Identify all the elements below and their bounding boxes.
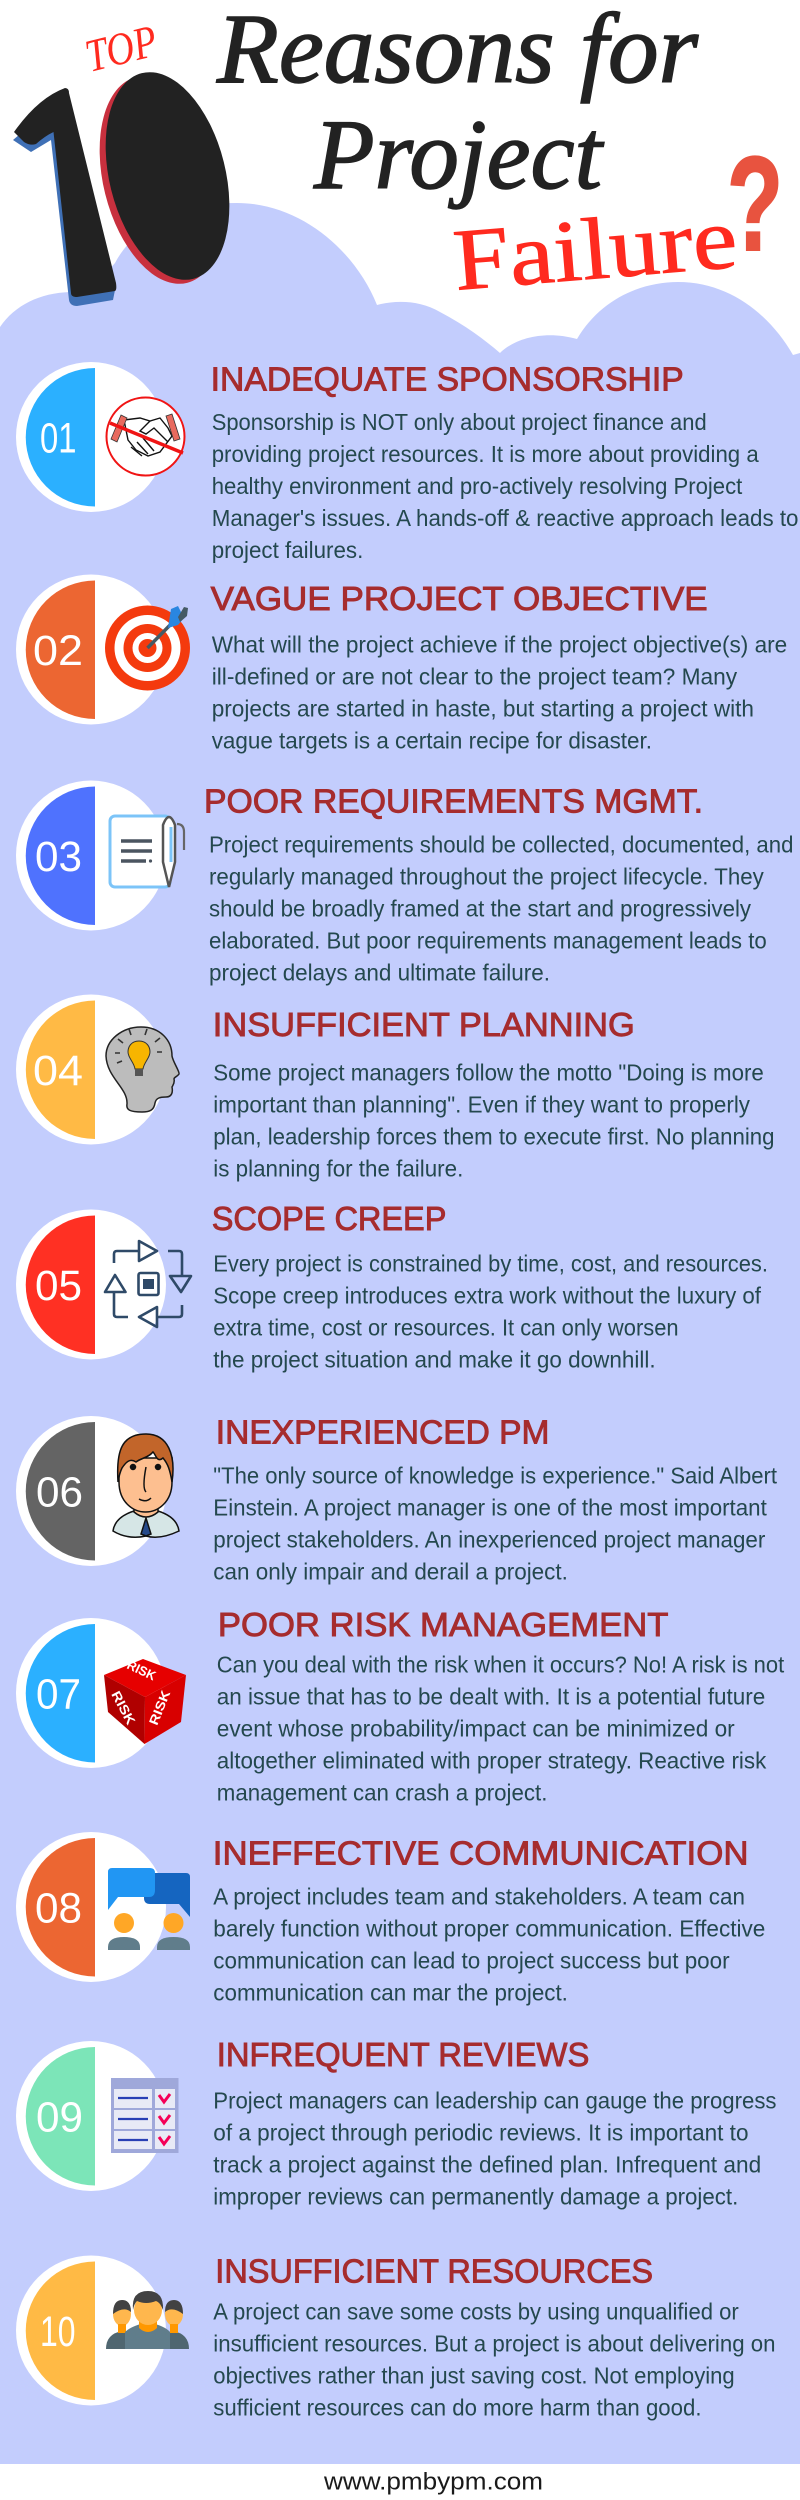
heading: VAGUE PROJECT OBJECTIVE	[211, 580, 708, 617]
body text: Einstein. A project manager is one of the most important	[213, 1494, 767, 1520]
body text	[209, 831, 793, 985]
body text: Every project is constrained by time, cost, and resources.	[213, 1251, 768, 1277]
body text: management can crash a project.	[217, 1779, 547, 1805]
number badge 09: 09	[36, 2094, 83, 2142]
heading: INFREQUENT REVIEWS	[217, 2036, 589, 2073]
body text	[212, 631, 787, 753]
panel: 05 scope creep	[16, 1200, 768, 1373]
number badge 04	[16, 994, 166, 1144]
body text	[213, 2298, 776, 2420]
body text: communication can mar the project.	[213, 1979, 568, 2005]
body text: vague targets is a certain recipe for disaster.	[212, 727, 652, 753]
body text: of a project through periodic reviews. It is important to	[213, 2119, 749, 2145]
body text: track a project against the defined plan. Infrequent and	[213, 2151, 761, 2177]
body text: event whose probability/impact can be minimized or	[217, 1715, 735, 1741]
body text: altogether eliminated with proper strategy. Reactive risk	[217, 1747, 767, 1773]
body text: plan, leadership forces them to execute first. No planning	[213, 1124, 775, 1150]
icon: checklist	[111, 2078, 178, 2153]
body text: sufficient resources can do more harm than good.	[213, 2394, 702, 2420]
number badge 01	[16, 362, 166, 512]
icon: risk die	[104, 1657, 186, 1744]
body text: extra time, cost or resources. It can only worsen	[213, 1315, 679, 1341]
number badge 09	[16, 2041, 166, 2191]
body text: healthy environment and pro-actively resolving Project	[212, 473, 743, 499]
heading: INSUFFICIENT RESOURCES	[215, 2252, 653, 2289]
body text: objectives rather than just saving cost. Not employing	[213, 2362, 735, 2388]
heading line: Failure: Failure	[450, 190, 741, 310]
icon: project manager	[113, 1434, 179, 1537]
panel: 09 infrequent reviews	[16, 2036, 776, 2209]
number badge 03: 03	[35, 833, 82, 881]
body text: Scope creep introduces extra work without the luxury of	[213, 1283, 762, 1309]
number badge 08	[16, 1832, 166, 1982]
body text: an issue that has to be dealt with. It is a potential future	[217, 1683, 765, 1709]
number badge 07: 07	[36, 1670, 81, 1718]
heading: INSUFFICIENT PLANNING	[213, 1006, 635, 1043]
number badge 03	[16, 780, 166, 930]
panel: 02 vague project objective	[16, 574, 787, 753]
body text: A project can save some costs by using unqualified or	[213, 2298, 739, 2324]
body text: is planning for the failure.	[213, 1156, 463, 1182]
icon: team of people	[106, 2291, 189, 2349]
number badge 07	[16, 1618, 166, 1768]
heading: SCOPE CREEP	[212, 1200, 446, 1237]
body text: project delays and ultimate failure.	[209, 959, 550, 985]
heading: POOR REQUIREMENTS MGMT.	[204, 782, 703, 819]
body text: barely function without proper communication. Effective	[213, 1915, 765, 1941]
number badge 08: 08	[35, 1884, 82, 1932]
body text: ill-defined or are not clear to the project team? Many	[212, 663, 738, 689]
heading: INADEQUATE SPONSORSHIP	[211, 361, 684, 398]
body text: regularly managed throughout the project lifecycle. They	[209, 863, 764, 889]
body text: important than planning". Even if they want to properly	[213, 1092, 750, 1118]
body text: Sponsorship is NOT only about project finance and	[212, 409, 707, 435]
body text: Project requirements should be collected, documented, and	[209, 831, 793, 857]
body text	[213, 2087, 777, 2209]
icon: cycle arrows	[105, 1241, 191, 1327]
icon: risk die: RISK	[146, 1687, 174, 1727]
panel: 01 inadequate sponsorship	[16, 361, 798, 563]
icon: notepad and pen	[110, 816, 184, 887]
title	[13, 0, 783, 310]
heading: INEXPERIENCED PM	[216, 1413, 550, 1450]
body text: Project managers can leadership can gauge the progress	[213, 2087, 777, 2113]
body text: should be broadly framed at the start and progressively	[209, 895, 751, 921]
body text: communication can lead to project success but poor	[213, 1947, 730, 1973]
panel: 03 poor requirements mgmt	[16, 780, 793, 985]
body text	[212, 409, 798, 563]
heading: POOR RISK MANAGEMENT	[218, 1606, 668, 1643]
body text: project failures.	[212, 537, 363, 563]
footer website: www.pmbypm.com	[323, 2468, 543, 2495]
body text: elaborated. But poor requirements management leads to	[209, 927, 767, 953]
body text: Manager's issues. A hands-off & reactive approach leads to	[212, 505, 798, 531]
body text: insufficient resources. But a project is about delivering on	[213, 2330, 776, 2356]
body text	[213, 1060, 775, 1182]
number badge 02	[16, 574, 166, 724]
big number 10	[13, 59, 249, 306]
panel: 06 inexperienced pm	[16, 1413, 778, 1584]
icon: target	[105, 606, 190, 690]
TOP label: TOP	[80, 15, 162, 82]
icon: no handshake	[106, 398, 184, 476]
body text: A project includes team and stakeholders. A team can	[213, 1883, 745, 1909]
body text: "The only source of knowledge is experience." Said Albert	[213, 1462, 778, 1488]
body text: project stakeholders. An inexperienced project manager	[213, 1526, 766, 1552]
number badge 10	[16, 2256, 166, 2406]
panel: 10 insufficient resources	[16, 2252, 776, 2420]
number badge 10: 10	[40, 2308, 76, 2356]
body text: providing project resources. It is more about providing a	[212, 441, 759, 467]
panel: 04 insufficient planning	[16, 994, 774, 1182]
body text: can only impair and derail a project.	[213, 1558, 568, 1584]
panel: 08 ineffective communication	[16, 1832, 765, 2005]
body text	[213, 1462, 778, 1584]
number badge 05: 05	[35, 1262, 82, 1310]
body text: projects are started in haste, but starting a project with	[212, 695, 754, 721]
body text	[213, 1883, 765, 2005]
number badge 05	[16, 1210, 166, 1360]
number badge 04: 04	[33, 1047, 83, 1095]
heading line: Project: Project	[313, 99, 604, 210]
number badge 02: 02	[33, 627, 83, 675]
body text	[217, 1651, 785, 1805]
body text: Can you deal with the risk when it occurs? No! A risk is not	[217, 1651, 785, 1677]
body text: improper reviews can permanently damage a project.	[213, 2183, 738, 2209]
number badge 01: 01	[40, 414, 76, 462]
body text: the project situation and make it go downhill.	[213, 1347, 656, 1373]
heading: INEFFECTIVE COMMUNICATION	[213, 1834, 749, 1871]
icon: risk die: RISK	[125, 1657, 159, 1684]
icon: head with light bulb	[106, 1027, 179, 1112]
number badge 06	[16, 1416, 166, 1566]
body text: What will the project achieve if the project objective(s) are	[212, 631, 787, 657]
icon: risk die: RISK	[108, 1688, 139, 1728]
body text	[213, 1251, 768, 1373]
body text: Some project managers follow the motto "Doing is more	[213, 1060, 764, 1086]
panel: 07 poor risk management	[16, 1606, 785, 1805]
icon: speech bubbles and people	[108, 1868, 190, 1950]
number badge 06: 06	[36, 1468, 83, 1516]
